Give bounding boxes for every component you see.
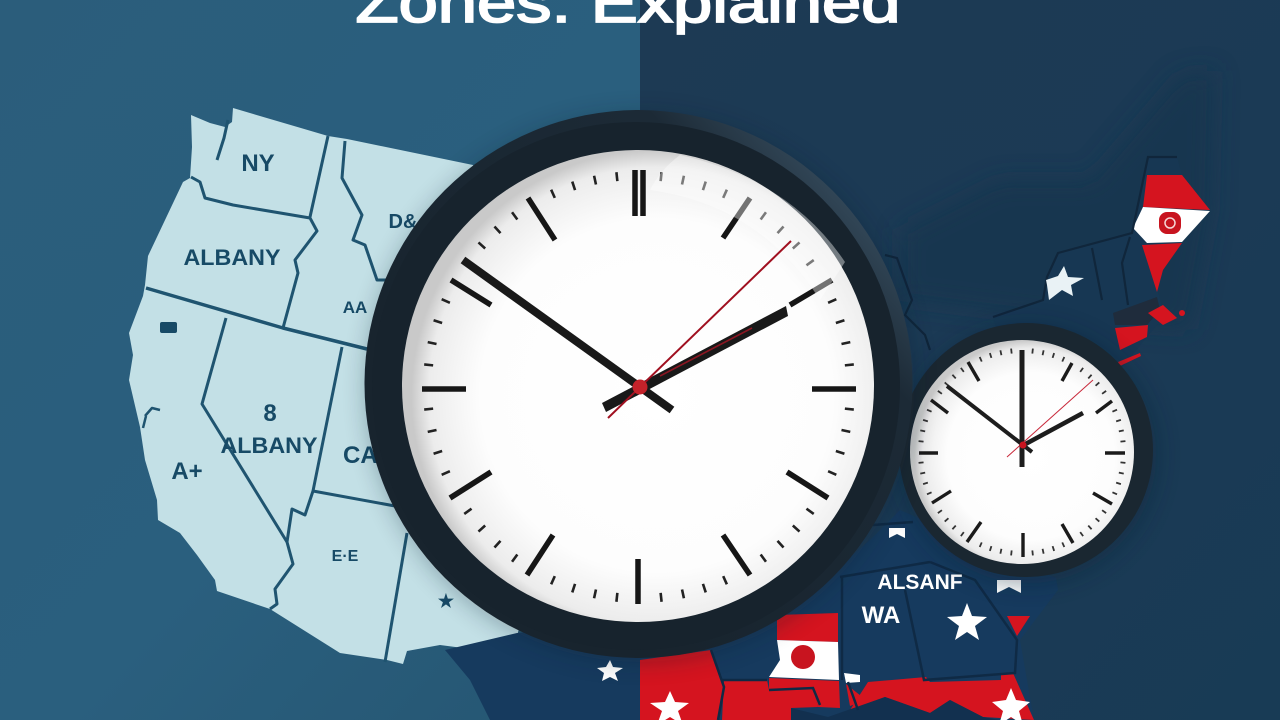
map labels: western states: A+ <box>171 458 203 485</box>
glass reflection <box>650 155 845 300</box>
map labels: western states: NY <box>241 150 275 177</box>
large clock <box>364 110 914 662</box>
map: western states <box>129 108 560 664</box>
map labels: western states: ALBANY <box>184 245 281 270</box>
map labels: western states <box>160 150 455 611</box>
small clock <box>899 323 1156 583</box>
map labels: western states: ALBANY <box>220 433 318 458</box>
flag band with seal <box>769 640 839 680</box>
red state blocks <box>640 650 724 720</box>
map labels: western states: E·E <box>332 548 359 565</box>
large clock hands <box>463 241 791 418</box>
background: left teal half <box>0 0 640 720</box>
map labels: western states: AA <box>343 298 367 317</box>
map labels: western states: CA <box>343 442 378 469</box>
large clock hour ticks <box>422 170 856 604</box>
map labels: western states: 8 <box>263 400 277 427</box>
map labels: western states: ★ <box>438 591 455 611</box>
map: eastern states south section: WA <box>862 602 900 629</box>
small clock hour ticks <box>919 362 1125 557</box>
map: eastern states south section <box>445 510 1058 720</box>
map: New England section <box>885 157 1210 370</box>
faint shadow of eastern landmass <box>900 70 1215 330</box>
small clock minute ticks <box>919 349 1125 555</box>
large clock minute ticks <box>424 172 854 602</box>
small clock hands <box>947 350 1093 467</box>
map labels: western states: D& <box>389 211 417 233</box>
labels and stars: ALSANF <box>877 571 963 594</box>
background: right navy half <box>640 0 1280 720</box>
